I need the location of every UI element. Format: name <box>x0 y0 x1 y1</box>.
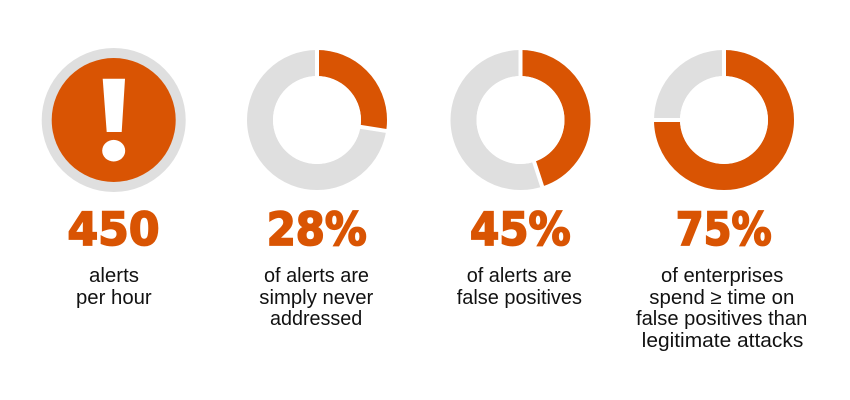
statistic: 28%: 28% <box>267 203 367 256</box>
description: of enterprises spend more time on false positives than legitimate attacks: spend ≥ time on <box>649 287 794 309</box>
description: of enterprises spend more time on false positives than legitimate attacks: legitimate attacks <box>642 330 803 352</box>
panel: alerts per hour <box>42 48 186 309</box>
description: of enterprises spend more time on false positives than legitimate attacks: false positives than <box>636 308 807 330</box>
description: of alerts are simply never addressed: of alerts are <box>264 265 369 287</box>
donut chart: 45% <box>464 45 578 191</box>
description: of alerts are simply never addressed <box>259 265 374 330</box>
description: of enterprises spend more time on false positives than legitimate attacks <box>636 265 807 352</box>
description: of alerts are false positives <box>457 265 582 309</box>
statistic: 45%: 45% <box>470 203 571 256</box>
description: of alerts are false positives: of alerts are <box>467 265 572 287</box>
donut chart: 75% <box>649 45 781 177</box>
description: of alerts are simply never addressed: addressed <box>270 308 362 330</box>
panel: enterprises time on false positives <box>636 45 807 352</box>
description: alerts per hour: per hour <box>76 287 152 309</box>
panel: false positives <box>457 45 582 309</box>
panel: never addressed <box>259 45 391 330</box>
icon: exclamation alert badge <box>42 48 186 192</box>
donut chart: 28% <box>260 45 391 177</box>
statistic: 450: 450 <box>68 203 160 256</box>
description: of enterprises spend more time on false positives than legitimate attacks: of enterprises <box>661 265 783 287</box>
description: of alerts are false positives: false positives <box>457 287 582 309</box>
statistic: 75%: 75% <box>676 203 772 256</box>
description: alerts per hour <box>76 265 152 309</box>
description: alerts per hour: alerts <box>89 265 139 287</box>
description: of alerts are simply never addressed: simply never <box>259 287 374 309</box>
